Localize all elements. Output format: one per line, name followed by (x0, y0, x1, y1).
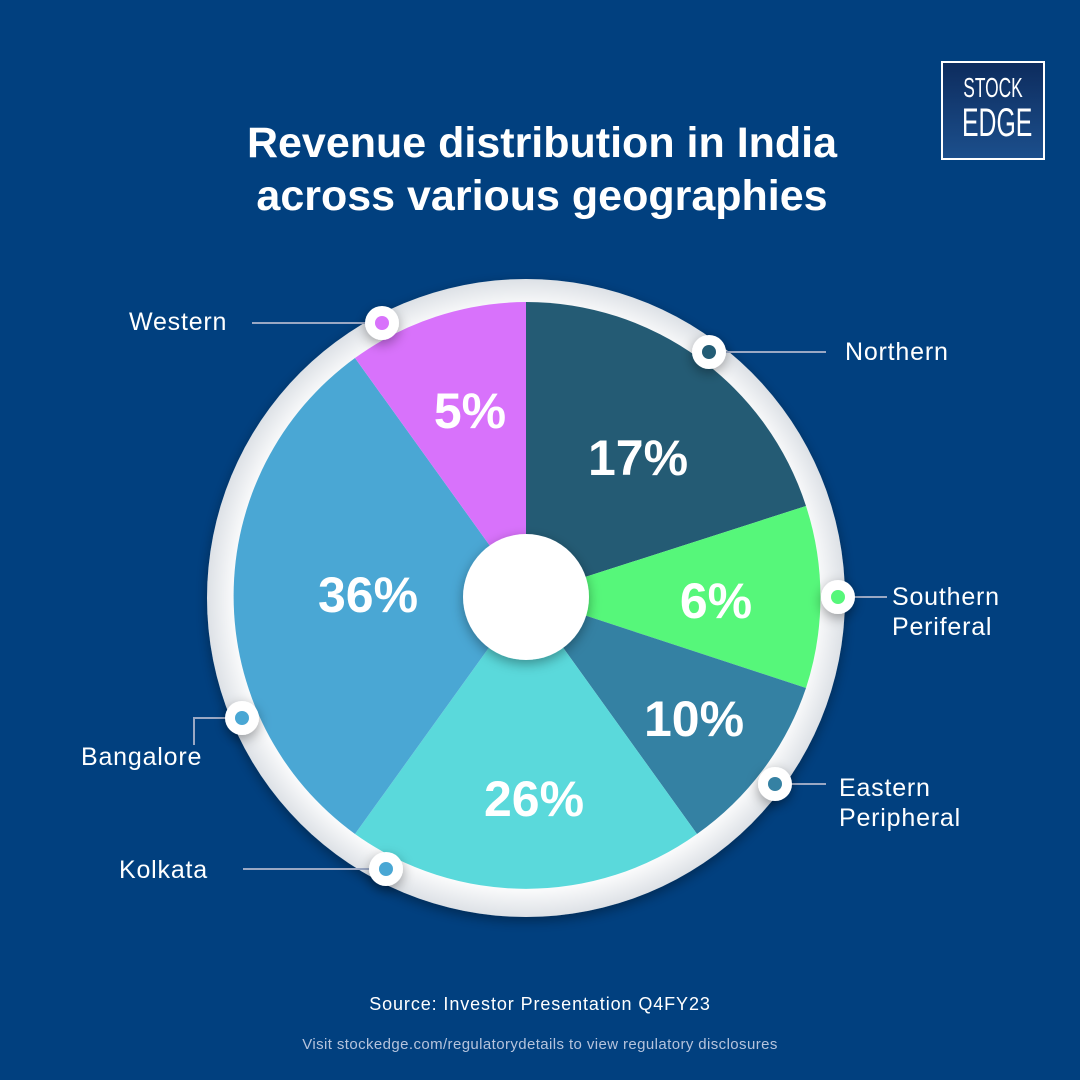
percentages: 6% (680, 573, 752, 629)
labels: Bangalore (81, 743, 202, 771)
percentages: 5% (434, 383, 506, 439)
labels: Peripheral (839, 804, 961, 832)
labels: Southern (892, 583, 1000, 611)
labels: Western (129, 308, 227, 336)
logo: EDGE (962, 101, 1032, 145)
pie slices (234, 302, 820, 889)
title: Revenue distribution in India (247, 119, 837, 167)
labels: Periferal (892, 613, 992, 641)
labels: Northern (845, 338, 949, 366)
logo (941, 61, 1045, 160)
labels (81, 308, 1000, 884)
footer note: Visit stockedge.com/regulatorydetails to view regulatory disclosures (302, 1036, 778, 1053)
center hole (463, 534, 589, 660)
percentages: 10% (644, 691, 744, 747)
percentages (318, 383, 752, 827)
source: Source: Investor Presentation Q4FY23 (369, 994, 711, 1014)
percentages: 17% (588, 430, 688, 486)
percentages: 36% (318, 567, 418, 623)
title: across various geographies (256, 172, 828, 220)
percentages: 26% (484, 771, 584, 827)
ring (207, 279, 845, 917)
connector lines (194, 323, 887, 869)
markers (225, 306, 855, 886)
labels: Kolkata (119, 856, 208, 884)
labels: Eastern (839, 774, 931, 802)
title (247, 119, 838, 220)
logo: STOCK (963, 72, 1023, 103)
